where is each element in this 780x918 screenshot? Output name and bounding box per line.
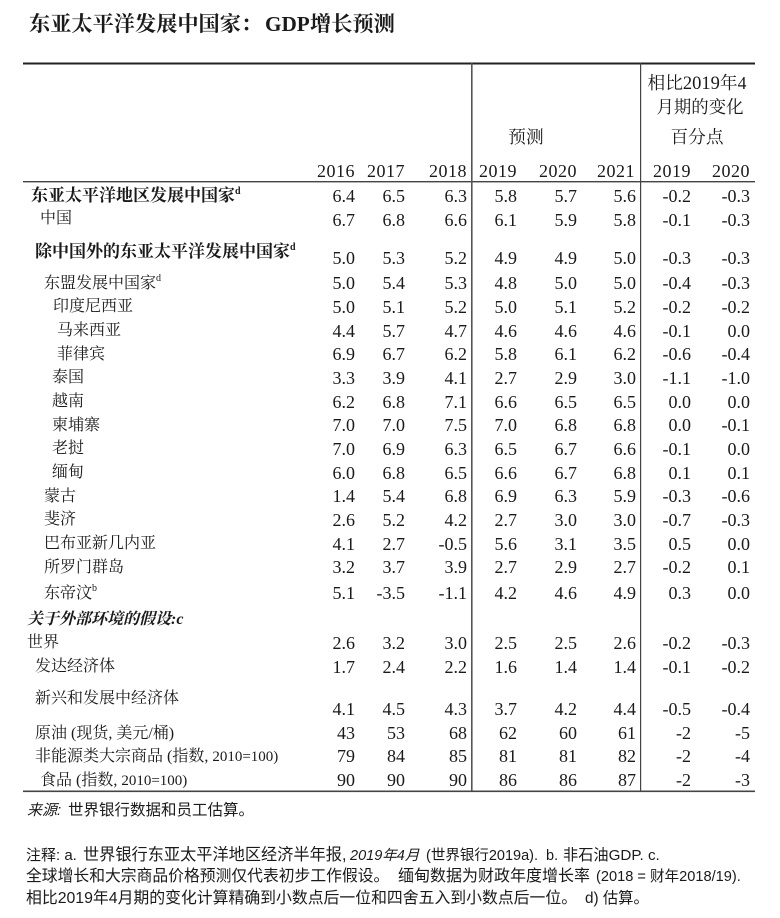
row: Food: 86 (499, 770, 517, 790)
row: Cambodia: 7.5 (444, 415, 467, 435)
row: Myanmar: 0.1 (728, 463, 750, 483)
row: East Asia and Pacific: 6.4 (332, 186, 355, 206)
row: Papua New Guinea: 巴布亚新几内亚 (44, 534, 156, 552)
row: World: -0.3 (722, 633, 750, 653)
row: World: -0.2 (662, 633, 691, 653)
row: Advanced economies (35, 657, 750, 677)
row: Solomon Islands: 2.9 (554, 557, 577, 577)
row: Food: -2 (676, 770, 691, 790)
row: Malaysia: 0.0 (728, 321, 750, 341)
row: Non-energy commodities: 非能源类大宗商品 (指数, 2010=100) (35, 747, 278, 765)
row: Crude oil: -2 (676, 723, 691, 743)
row: Myanmar: 缅甸 (52, 463, 84, 481)
row: Solomon Islands: -0.2 (662, 557, 691, 577)
row: East Asia and Pacific: 5.8 (494, 186, 517, 206)
row: Vietnam: 越南 (52, 392, 84, 410)
column headers: 2016 (317, 161, 355, 181)
row: Mongolia: 6.8 (444, 486, 467, 506)
row: ASEAN: 5.0 (554, 273, 577, 293)
row: Cambodia: 7.0 (382, 415, 405, 435)
row: Food: 食品 (指数, 2010=100) (40, 771, 187, 789)
row: Crude oil: 62 (499, 723, 517, 743)
row: Malaysia: -0.1 (662, 321, 691, 341)
row: Myanmar: 6.7 (554, 463, 577, 483)
row: Thailand (52, 368, 750, 388)
column headers: 2019 (653, 161, 691, 181)
row: Timor-Leste (44, 583, 750, 603)
row: Non-energy commodities: 84 (387, 746, 405, 766)
row: Mongolia: 6.9 (494, 486, 517, 506)
row: excluding China: 4.9 (494, 248, 517, 268)
row: Cambodia: 柬埔寨 (52, 416, 100, 434)
row: China: 5.8 (614, 210, 636, 230)
row: Laos: 7.0 (332, 439, 355, 459)
row: Food: 86 (559, 770, 577, 790)
row: Indonesia: 5.2 (614, 297, 636, 317)
row: Philippines: 菲律宾 (57, 345, 105, 363)
row: Malaysia: 4.6 (494, 321, 517, 341)
row: Crude oil: 60 (559, 723, 577, 743)
row: East Asia and Pacific: -0.3 (722, 186, 750, 206)
row: Thailand: -1.0 (722, 368, 750, 388)
row: Myanmar (52, 463, 750, 483)
row: Advanced economies: 1.4 (554, 657, 577, 677)
row: Thailand: 3.0 (614, 368, 636, 388)
row: China: -0.3 (722, 210, 750, 230)
row: Laos: -0.1 (662, 439, 691, 459)
row: China: 6.6 (444, 210, 467, 230)
row: Laos (52, 439, 750, 459)
notes: b. (546, 848, 558, 864)
row: Food: -3 (735, 770, 750, 790)
row: excluding China: 5.3 (382, 248, 405, 268)
row: Myanmar: 0.1 (668, 463, 691, 483)
row: Non-energy commodities: 82 (618, 746, 636, 766)
row: Cambodia: 0.0 (668, 415, 691, 435)
row: Papua New Guinea (44, 534, 750, 554)
section heading: external environment assumptions: 关于外部环境的假设:c (27, 610, 183, 628)
notes: d) 估算。 (585, 889, 649, 907)
row: Thailand: 3.3 (332, 368, 355, 388)
row: Crude oil: -5 (735, 723, 750, 743)
row: ASEAN: 5.0 (332, 273, 355, 293)
row: Non-energy commodities (35, 746, 750, 766)
row: Thailand: -1.1 (662, 368, 691, 388)
row: Malaysia: 5.7 (382, 321, 405, 341)
row: Non-energy commodities: 81 (559, 746, 577, 766)
row: Advanced economies: -0.2 (722, 657, 750, 677)
row: World: 世界 (27, 633, 59, 651)
row: China: 6.8 (382, 210, 405, 230)
row: Advanced economies: 1.6 (494, 657, 517, 677)
row: Timor-Leste: 5.1 (332, 583, 355, 603)
row: Philippines: -0.6 (662, 344, 691, 364)
row: excluding China: 5.0 (332, 248, 355, 268)
row: World: 3.0 (444, 633, 467, 653)
column headers: 2020 (712, 161, 750, 181)
row: Vietnam: 0.0 (668, 392, 691, 412)
row: Food (40, 770, 750, 790)
row: Timor-Leste: 东帝汶 (44, 585, 92, 602)
row: China: 6.1 (494, 210, 517, 230)
row: Crude oil: 61 (618, 723, 636, 743)
row: Laos: 6.5 (494, 439, 517, 459)
row: Philippines: 6.9 (332, 344, 355, 364)
row: Malaysia: 4.6 (554, 321, 577, 341)
row: Papua New Guinea: -0.5 (438, 534, 467, 554)
row: excluding China: -0.3 (722, 248, 750, 268)
row: Laos: 6.9 (382, 439, 405, 459)
row: World: 2.6 (614, 633, 636, 653)
row: Vietnam: 6.5 (554, 392, 577, 412)
row: Emerging and developing economies: 4.2 (554, 699, 577, 719)
row: Malaysia (57, 321, 750, 341)
notes: 世界银行东亚太平洋地区经济半年报, (83, 846, 346, 864)
row: Thailand: 2.7 (494, 368, 517, 388)
row: ASEAN: 东盟发展中国家 (44, 275, 156, 292)
notes: 2019年4月 (349, 847, 420, 864)
row: Cambodia: -0.1 (722, 415, 750, 435)
row: Indonesia: -0.2 (662, 297, 691, 317)
row: Advanced economies: 发达经济体 (35, 657, 115, 675)
row: Mongolia: 5.4 (382, 486, 405, 506)
row: Timor-Leste: -3.5 (376, 583, 405, 603)
row: World: 3.2 (382, 633, 405, 653)
table frame (23, 62, 755, 792)
row: Fiji: -0.3 (722, 510, 750, 530)
column headers: 2021 (597, 161, 635, 181)
row: East Asia and Pacific: 5.6 (614, 186, 636, 206)
row: Malaysia: 4.4 (332, 321, 355, 341)
row: Solomon Islands: 0.1 (728, 557, 750, 577)
row: ASEAN: 5.3 (444, 273, 467, 293)
row: Vietnam: 0.0 (728, 392, 750, 412)
row: Advanced economies: 2.4 (382, 657, 405, 677)
notes: 非石油GDP. c. (563, 847, 660, 864)
row: Fiji: 5.2 (382, 510, 405, 530)
column headers: 2017 (367, 161, 405, 181)
row: Indonesia: 印度尼西亚 (53, 297, 133, 315)
row: Vietnam (52, 392, 750, 412)
row: Cambodia: 7.0 (332, 415, 355, 435)
row: excluding China (35, 241, 750, 268)
row: Fiji (44, 510, 750, 530)
row: excluding China: 5.0 (614, 248, 636, 268)
row: Food: 90 (449, 770, 467, 790)
row: Cambodia: 6.8 (554, 415, 577, 435)
row: Timor-Leste: 4.2 (494, 583, 517, 603)
row: Cambodia (52, 415, 750, 435)
row: Emerging and developing economies: 4.5 (382, 699, 405, 719)
row: Vietnam: 7.1 (444, 392, 467, 412)
row: Fiji: 3.0 (554, 510, 577, 530)
row: Emerging and developing economies: 4.1 (332, 699, 355, 719)
row: Crude oil: 53 (387, 723, 405, 743)
row: China: 中国 (40, 209, 72, 227)
column headers: 百分点 (670, 127, 724, 147)
row: China (40, 209, 750, 230)
row: East Asia and Pacific: 6.3 (444, 186, 467, 206)
row: Philippines: 6.2 (444, 344, 467, 364)
title: 东亚太平洋发展中国家： (29, 12, 262, 36)
row: ASEAN: -0.4 (662, 273, 691, 293)
row: Non-energy commodities: -4 (735, 746, 750, 766)
row: Fiji: 2.6 (332, 510, 355, 530)
title: 增长预测 (310, 12, 395, 36)
row: Mongolia: 1.4 (332, 486, 355, 506)
row: Indonesia: 5.2 (444, 297, 467, 317)
row: Philippines: -0.4 (722, 344, 750, 364)
row: Laos: 6.3 (444, 439, 467, 459)
row: Vietnam: 6.6 (494, 392, 517, 412)
row: Food: 90 (387, 770, 405, 790)
row: Solomon Islands (44, 557, 750, 577)
row: Indonesia: 5.1 (554, 297, 577, 317)
row: Solomon Islands: 2.7 (614, 557, 636, 577)
notes: 注释: a. (26, 847, 77, 864)
row: Indonesia: -0.2 (722, 297, 750, 317)
row: China: -0.1 (662, 210, 691, 230)
row: Advanced economies: 1.4 (614, 657, 636, 677)
row: Mongolia: -0.3 (662, 486, 691, 506)
row: Papua New Guinea: 3.5 (614, 534, 636, 554)
row: Cambodia: 7.0 (494, 415, 517, 435)
row: Philippines: 5.8 (494, 344, 517, 364)
row: Malaysia: 4.6 (614, 321, 636, 341)
source line: 世界银行数据和员工估算。 (68, 800, 254, 819)
column headers: 2019 (479, 161, 517, 181)
row: Philippines: 6.1 (554, 344, 577, 364)
row: Mongolia: 蒙古 (44, 487, 76, 505)
row: excluding China: d (290, 242, 296, 253)
row: World: 2.5 (554, 633, 577, 653)
notes: (世界银行2019a). (426, 847, 538, 864)
row: Indonesia: 5.0 (494, 297, 517, 317)
column headers: 2020 (539, 161, 577, 181)
row: Philippines: 6.2 (614, 344, 636, 364)
row: Solomon Islands: 3.7 (382, 557, 405, 577)
row: East Asia and Pacific: d (235, 186, 241, 197)
row: Philippines (57, 344, 750, 364)
row: Fiji: 4.2 (444, 510, 467, 530)
row: Papua New Guinea: 4.1 (332, 534, 355, 554)
row: Myanmar: 6.0 (332, 463, 355, 483)
row: excluding China: 5.2 (444, 248, 467, 268)
row: Thailand: 2.9 (554, 368, 577, 388)
row: Mongolia (44, 486, 750, 506)
row: Timor-Leste: b (92, 583, 97, 594)
row: Mongolia: -0.6 (722, 486, 750, 506)
row: Cambodia: 6.8 (614, 415, 636, 435)
row: Myanmar: 6.8 (382, 463, 405, 483)
row: Myanmar: 6.5 (444, 463, 467, 483)
row: Laos: 老挝 (52, 439, 84, 457)
row: Vietnam: 6.2 (332, 392, 355, 412)
row: ASEAN: d (156, 273, 161, 284)
row: ASEAN: -0.3 (722, 273, 750, 293)
row: Papua New Guinea: 3.1 (554, 534, 577, 554)
column headers: 相比2019年4 (648, 72, 747, 94)
row: Timor-Leste: 0.3 (668, 583, 691, 603)
row: Emerging and developing economies: 4.3 (444, 699, 467, 719)
row: Fiji: 2.7 (494, 510, 517, 530)
row: World: 2.5 (494, 633, 517, 653)
row: Solomon Islands: 3.9 (444, 557, 467, 577)
row: Timor-Leste: 4.9 (614, 583, 636, 603)
row: Philippines: 6.7 (382, 344, 405, 364)
row: Fiji: 3.0 (614, 510, 636, 530)
row: East Asia and Pacific: 5.7 (554, 186, 577, 206)
row: Vietnam: 6.8 (382, 392, 405, 412)
row: Non-energy commodities: -2 (676, 746, 691, 766)
row: Mongolia: 5.9 (614, 486, 636, 506)
column headers: 预测 (508, 127, 544, 147)
row: Advanced economies: 2.2 (444, 657, 467, 677)
row: East Asia and Pacific (31, 185, 750, 206)
row: Emerging and developing economies: 新兴和发展中经济体 (35, 689, 179, 707)
row: China: 5.9 (554, 210, 577, 230)
row: ASEAN (44, 273, 750, 293)
row: ASEAN: 5.0 (614, 273, 636, 293)
row: World: 2.6 (332, 633, 355, 653)
row: East Asia and Pacific: -0.2 (662, 186, 691, 206)
title: GDP (265, 12, 310, 36)
row: excluding China: -0.3 (662, 248, 691, 268)
row: Papua New Guinea: 0.5 (668, 534, 691, 554)
row: Crude oil: 43 (337, 723, 355, 743)
column headers: 2018 (429, 161, 467, 181)
row: Papua New Guinea: 0.0 (728, 534, 750, 554)
row: Thailand: 3.9 (382, 368, 405, 388)
row: Papua New Guinea: 2.7 (382, 534, 405, 554)
row: Mongolia: 6.3 (554, 486, 577, 506)
row: China: 6.7 (332, 210, 355, 230)
row: Solomon Islands: 所罗门群岛 (44, 558, 124, 576)
column headers: 月期的变化 (657, 97, 743, 117)
row: Timor-Leste: 4.6 (554, 583, 577, 603)
row: Indonesia: 5.0 (332, 297, 355, 317)
row: Solomon Islands: 3.2 (332, 557, 355, 577)
source line: 来源: (27, 802, 61, 819)
row: Emerging and developing economies: -0.4 (722, 699, 750, 719)
row: Laos: 0.0 (728, 439, 750, 459)
row: Food: 90 (337, 770, 355, 790)
row: East Asia and Pacific: 6.5 (382, 186, 405, 206)
row: Thailand: 4.1 (444, 368, 467, 388)
row: East Asia and Pacific: 东亚太平洋地区发展中国家 (31, 186, 235, 205)
row: Vietnam: 6.5 (614, 392, 636, 412)
row: Solomon Islands: 2.7 (494, 557, 517, 577)
row: Myanmar: 6.8 (614, 463, 636, 483)
row: Crude oil: 68 (449, 723, 467, 743)
notes: 相比2019年4月期的变化计算精确到小数点后一位和四舍五入到小数点后一位。 (26, 888, 577, 907)
row: Malaysia: 4.7 (444, 321, 467, 341)
row: Malaysia: 马来西亚 (57, 321, 121, 339)
notes (26, 846, 741, 907)
row: Crude oil: 原油 (现货, 美元/桶) (35, 724, 174, 742)
row: Crude oil (35, 723, 750, 743)
row: Indonesia (53, 297, 750, 317)
row: Indonesia: 5.1 (382, 297, 405, 317)
notes: 全球增长和大宗商品价格预测仅代表初步工作假设。 (26, 867, 389, 885)
row: Papua New Guinea: 5.6 (494, 534, 517, 554)
row: Non-energy commodities: 85 (449, 746, 467, 766)
row: Fiji: 斐济 (44, 510, 76, 528)
column headers (317, 72, 750, 181)
row: Timor-Leste: 0.0 (728, 583, 750, 603)
row: excluding China: 除中国外的东亚太平洋发展中国家 (35, 242, 290, 261)
row: ASEAN: 4.8 (494, 273, 517, 293)
row: Non-energy commodities: 79 (337, 746, 355, 766)
row: Emerging and developing economies: 4.4 (614, 699, 636, 719)
row: Non-energy commodities: 81 (499, 746, 517, 766)
notes: (2018 = 财年2018/19). (596, 868, 741, 885)
row: Laos: 6.7 (554, 439, 577, 459)
row: Emerging and developing economies: 3.7 (494, 699, 517, 719)
row: Food: 87 (618, 770, 636, 790)
row: Fiji: -0.7 (662, 510, 691, 530)
row: Emerging and developing economies (35, 689, 750, 719)
notes: 缅甸数据为财政年度增长率 (398, 867, 590, 885)
row: Laos: 6.6 (614, 439, 636, 459)
row: ASEAN: 5.4 (382, 273, 405, 293)
row: Myanmar: 6.6 (494, 463, 517, 483)
row: Emerging and developing economies: -0.5 (662, 699, 691, 719)
row: Timor-Leste: -1.1 (438, 583, 467, 603)
row: Advanced economies: 1.7 (332, 657, 355, 677)
row: Advanced economies: -0.1 (662, 657, 691, 677)
row: Thailand: 泰国 (52, 368, 84, 386)
row: World (27, 633, 750, 653)
row: excluding China: 4.9 (554, 248, 577, 268)
